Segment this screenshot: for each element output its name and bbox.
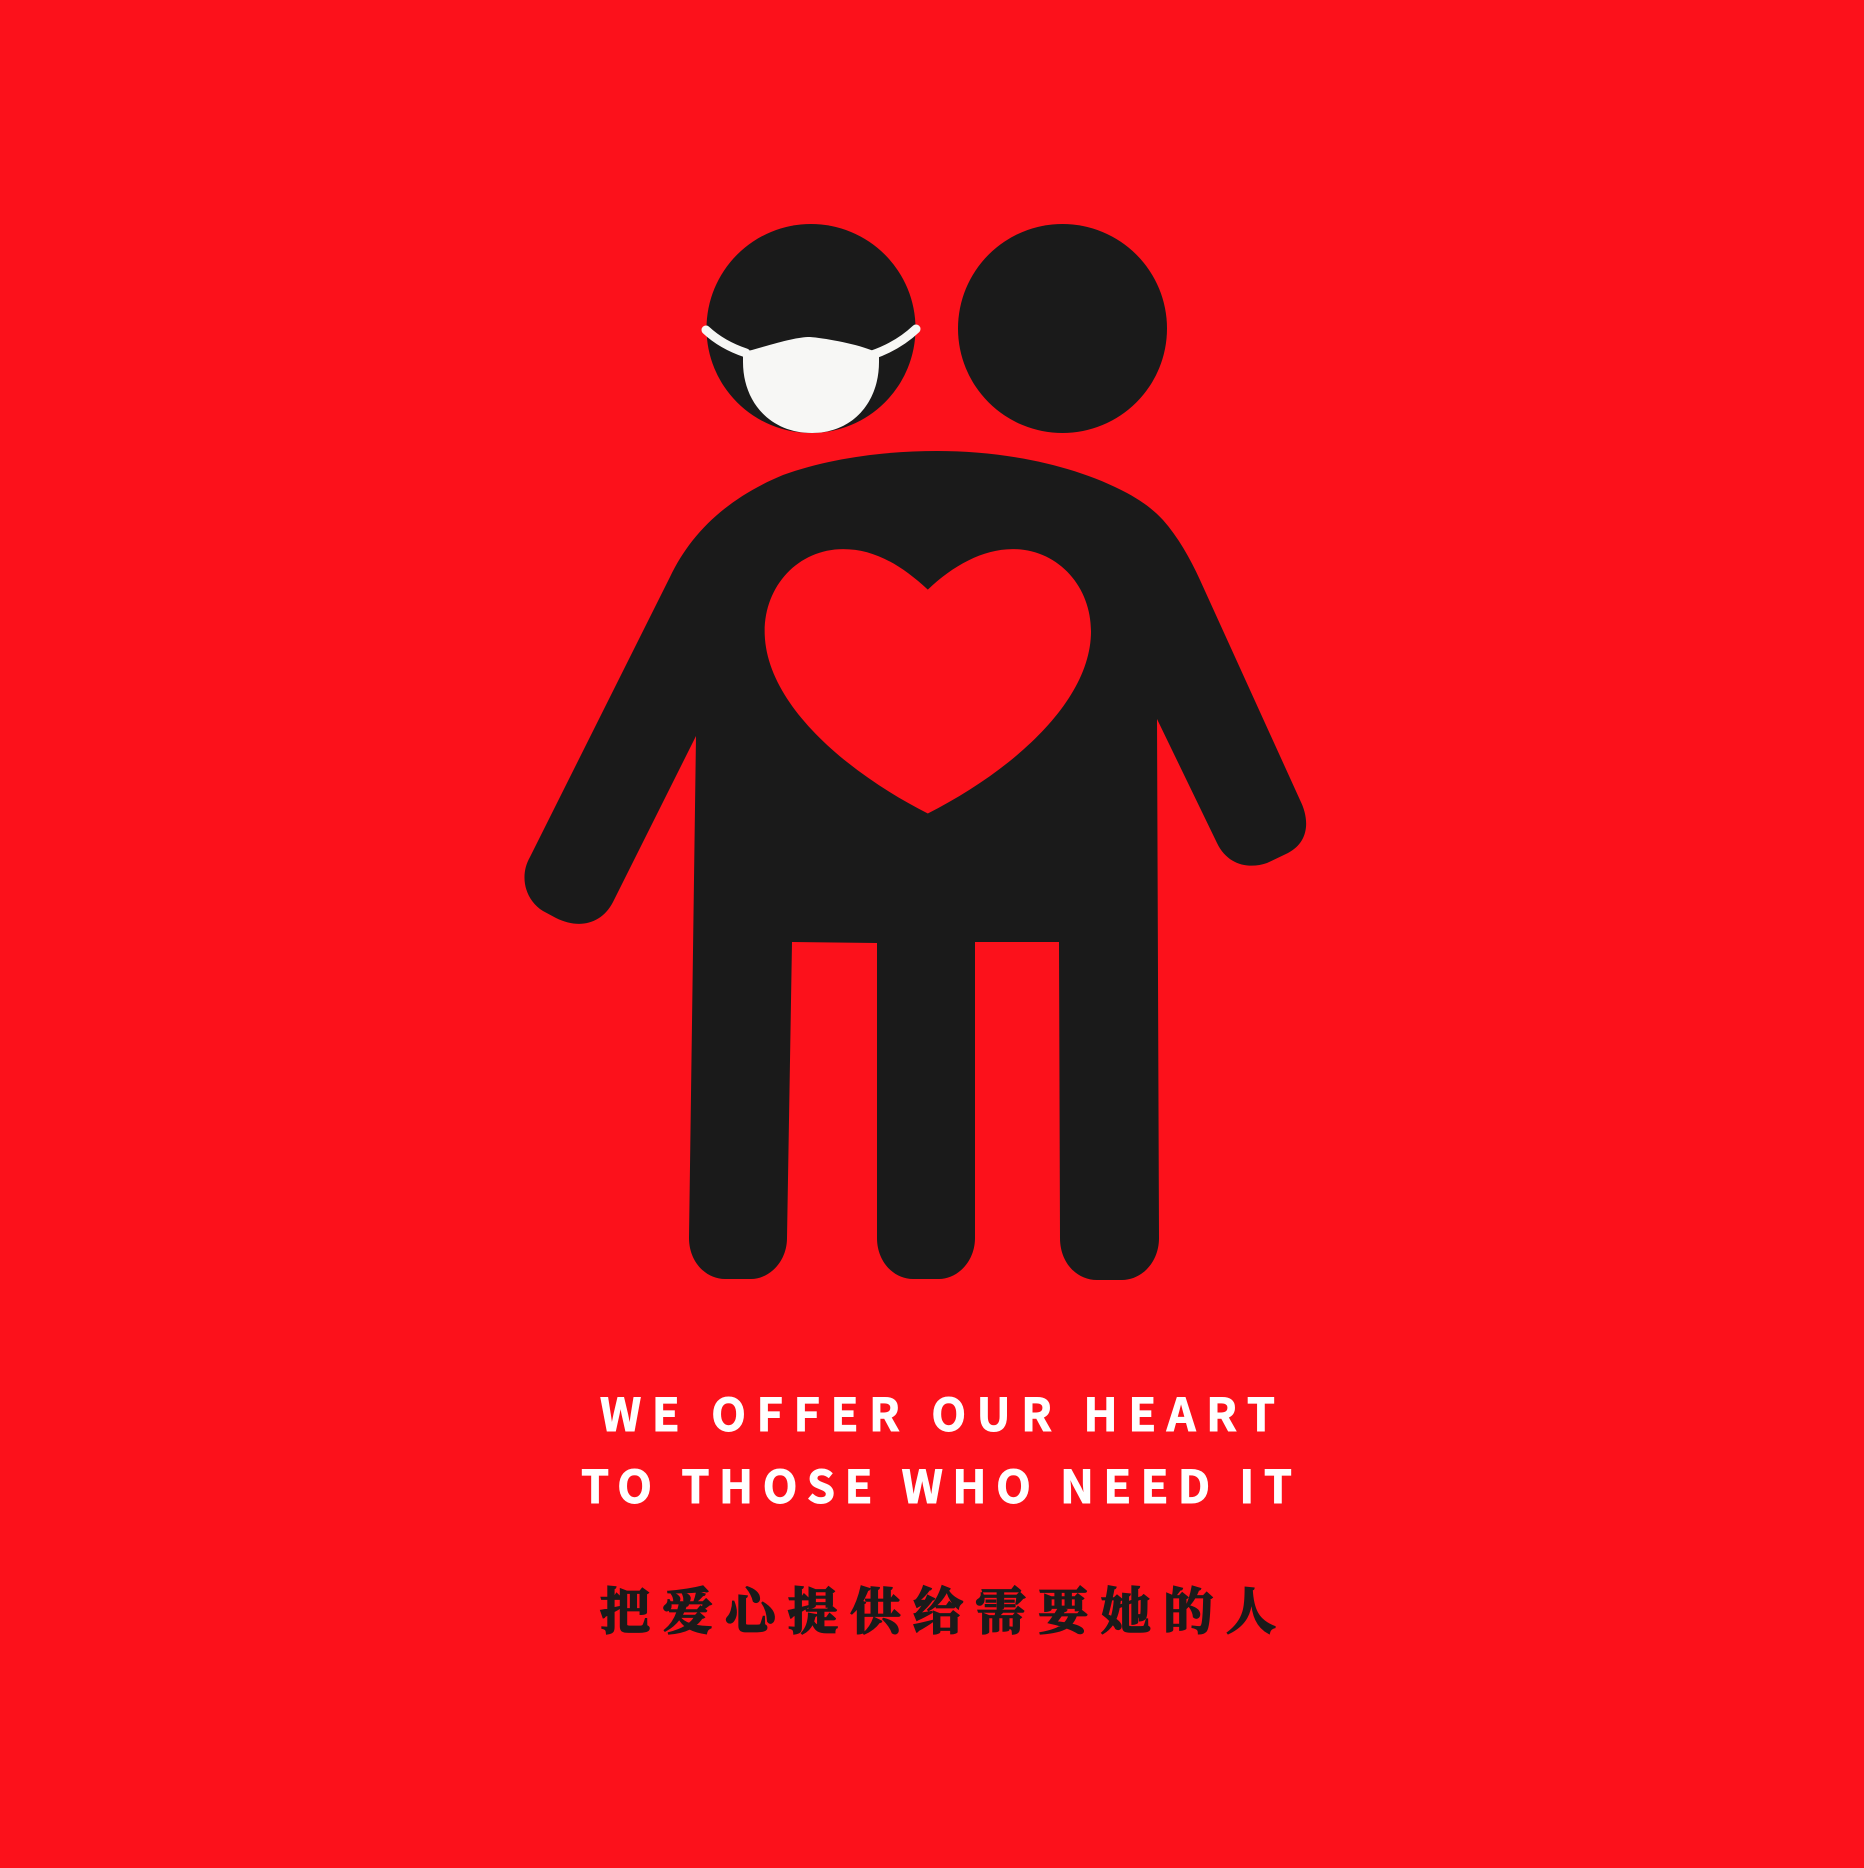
icon: heart bbox=[765, 549, 1091, 813]
body with arms and three legs bbox=[524, 451, 1306, 1280]
head: left person bbox=[706, 224, 916, 433]
slogan: English: TO THOSE WHO NEED IT bbox=[581, 1451, 1292, 1516]
figure: two people sharing one body bbox=[524, 224, 1306, 1280]
icon: face mask bbox=[706, 329, 916, 433]
slogan: English: WE OFFER OUR HEART bbox=[600, 1379, 1275, 1444]
slogan: English bbox=[581, 1379, 1292, 1516]
slogan: Chinese: 把爱心提供给需要她的人 bbox=[600, 1572, 1289, 1644]
head: right person bbox=[958, 224, 1167, 433]
